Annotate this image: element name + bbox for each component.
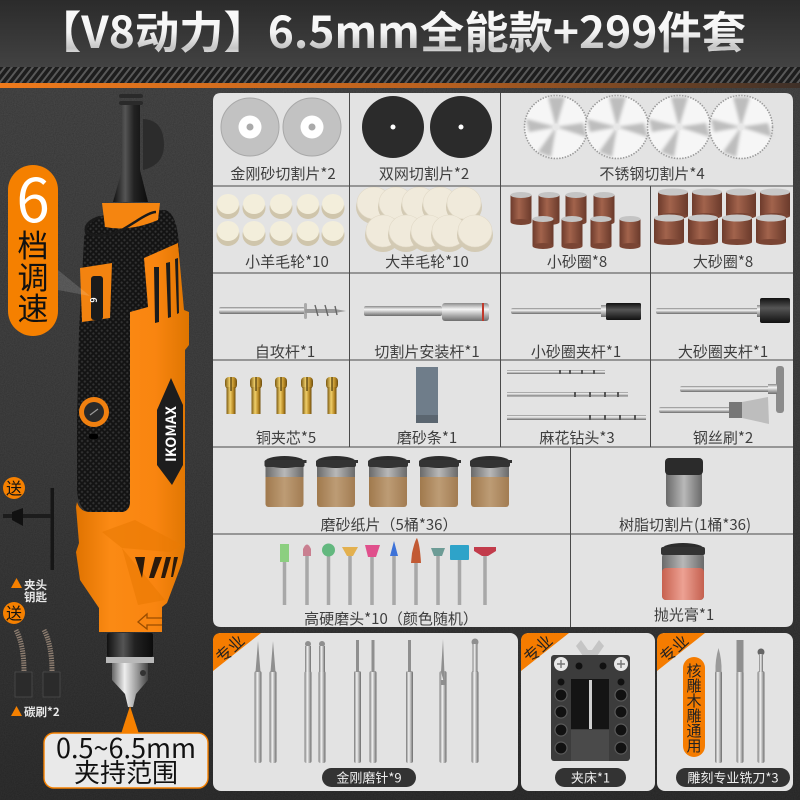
item: grinding heads: 高硬磨头*10（颜色随机） bbox=[304, 608, 478, 629]
panel: bench vise bbox=[517, 628, 655, 791]
item: brass collets bbox=[225, 377, 338, 448]
brush label: 碳刷*2 bbox=[24, 704, 60, 720]
item: self-tapping mandrel bbox=[219, 303, 346, 362]
item: stainless saw blades: 不锈钢切割片*4 bbox=[599, 163, 705, 184]
vertical callout: 木 bbox=[686, 690, 702, 711]
item: small band mandrel: 小砂圈夹杆*1 bbox=[531, 341, 621, 362]
label pill bbox=[322, 768, 416, 787]
vertical callout: 雕 bbox=[686, 675, 702, 696]
lower housing shading bbox=[102, 520, 182, 605]
lower vents bbox=[135, 557, 178, 578]
item: brass collets: 铜夹芯*5 bbox=[256, 427, 316, 448]
vertical callout: 雕 bbox=[686, 705, 702, 726]
corner tag: 专业 bbox=[653, 628, 693, 668]
speed pill bbox=[8, 153, 58, 336]
clamp range callout: 0.5~6.5mm bbox=[56, 727, 196, 766]
item: resin cutting discs jar: 树脂切割片(1桶*36) bbox=[619, 514, 751, 535]
burrs bbox=[254, 638, 478, 763]
icon: carbon brushes bbox=[15, 630, 60, 697]
item: disc mandrel bbox=[364, 303, 489, 362]
item: emery discs bbox=[221, 98, 341, 184]
item: large sanding bands bbox=[654, 188, 790, 272]
item: wire brushes bbox=[659, 366, 784, 448]
item: polishing paste jar: 抛光膏*1 bbox=[654, 604, 714, 625]
key label: 夹头 bbox=[24, 577, 47, 593]
clamp range callout: 夹持范围 bbox=[74, 753, 178, 790]
item: large band mandrel: 大砂圈夹杆*1 bbox=[678, 341, 768, 362]
item: double mesh discs bbox=[362, 96, 492, 184]
item: twist drill bits bbox=[507, 370, 646, 448]
item: sanding paper jars bbox=[264, 456, 512, 535]
corner tag: 专业 bbox=[517, 628, 557, 668]
item: sharpening stone: 磨砂条*1 bbox=[397, 427, 457, 448]
vise bbox=[551, 640, 630, 761]
vertical callout: 用 bbox=[686, 735, 702, 756]
item: small sanding bands: 小砂圈*8 bbox=[547, 251, 607, 272]
panel: accessories grid bbox=[213, 93, 793, 629]
item: disc mandrel: 切割片安装杆*1 bbox=[374, 341, 480, 362]
item: emery discs: 金刚砂切割片*2 bbox=[230, 163, 336, 184]
icon: chuck key bbox=[3, 488, 54, 570]
item: stainless saw blades bbox=[524, 96, 772, 184]
gift badge: brushes: 送 bbox=[6, 600, 22, 624]
item: polishing paste jar bbox=[654, 543, 714, 625]
collar and cord loop bbox=[86, 203, 160, 236]
hanger hook bbox=[143, 119, 164, 170]
corner tag: 专业 bbox=[209, 628, 249, 668]
side knob bbox=[79, 397, 109, 439]
item: double mesh discs: 双网切割片*2 bbox=[379, 163, 469, 184]
direction arrow bbox=[138, 614, 162, 629]
speed pill: 速 bbox=[18, 284, 48, 329]
label pill: 雕刻专业铣刀*3 bbox=[687, 768, 779, 786]
label pill: 夹床*1 bbox=[571, 768, 610, 786]
item: small felt wheels bbox=[216, 194, 344, 272]
item: small sanding bands bbox=[510, 192, 640, 272]
panel: diamond burrs bbox=[209, 628, 518, 791]
item: twist drill bits: 麻花钻头*3 bbox=[539, 427, 615, 448]
gift badge: key: 送 bbox=[6, 475, 22, 499]
label pill: 金刚磨针*9 bbox=[336, 768, 402, 786]
item: self-tapping mandrel: 自攻杆*1 bbox=[255, 341, 315, 362]
orange housing bbox=[76, 243, 189, 632]
speed dial: 6 bbox=[87, 297, 100, 303]
vertical callout: 通 bbox=[686, 720, 702, 741]
vertical callout bbox=[683, 657, 705, 757]
item: grinding heads bbox=[280, 538, 496, 629]
logo badge: IKOMAX bbox=[161, 406, 181, 462]
item: sharpening stone bbox=[397, 367, 457, 448]
power cord strain relief bbox=[113, 94, 148, 202]
item: resin cutting discs jar bbox=[619, 458, 751, 535]
speed pill: 6 bbox=[16, 153, 50, 240]
item: sanding paper jars: 磨砂纸片（5桶*36） bbox=[321, 514, 457, 535]
speed pill: 调 bbox=[18, 253, 48, 298]
item: large band mandrel bbox=[656, 298, 790, 362]
header band bbox=[0, 0, 800, 88]
speed dial bbox=[80, 263, 112, 322]
key label bbox=[11, 577, 47, 605]
item: large felt wheels bbox=[356, 187, 493, 272]
label pill bbox=[555, 768, 626, 787]
item: large sanding bands: 大砂圈*8 bbox=[693, 251, 753, 272]
item: large felt wheels: 大羊毛轮*10 bbox=[385, 251, 469, 272]
key label: 钥匙 bbox=[24, 589, 47, 605]
knurled black grip bbox=[77, 210, 182, 512]
panel: engraving cutters bbox=[653, 628, 793, 791]
power tool: rotary grinder bbox=[58, 94, 189, 707]
item: wire brushes: 钢丝刷*2 bbox=[693, 427, 753, 448]
cutters bbox=[715, 640, 764, 763]
speed pill: 档 bbox=[18, 221, 48, 266]
clamp range callout bbox=[44, 706, 208, 790]
logo badge bbox=[157, 378, 183, 485]
vertical callout: 核 bbox=[686, 660, 702, 681]
upper vents bbox=[154, 258, 179, 323]
drill chuck bbox=[106, 633, 154, 707]
beam from pill to dial bbox=[58, 270, 90, 296]
item: small band mandrel bbox=[511, 303, 641, 362]
item: small felt wheels: 小羊毛轮*10 bbox=[245, 251, 329, 272]
